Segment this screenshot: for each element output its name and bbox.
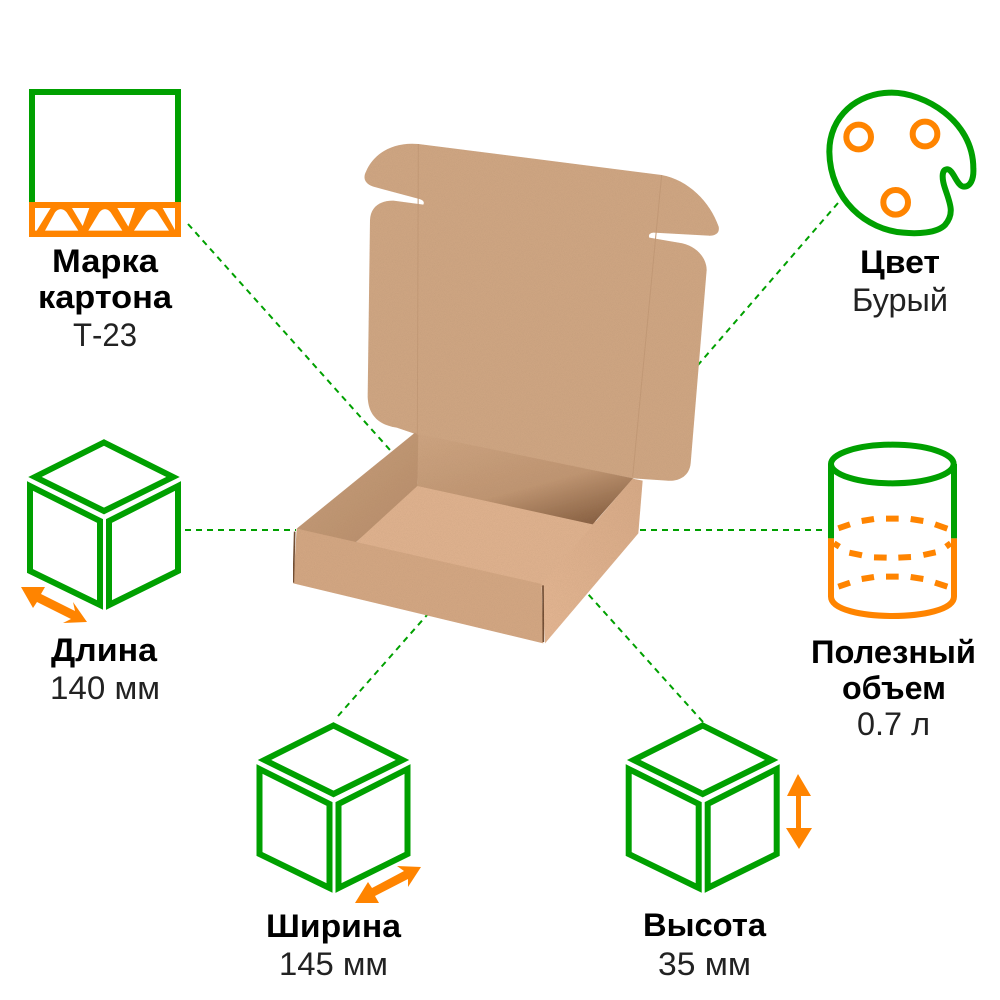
label: Марка картона: Т-23 xyxy=(73,317,137,353)
label: Ширина xyxy=(266,908,401,982)
left wall xyxy=(297,433,418,544)
length block: Длина xyxy=(21,442,178,706)
icon: corrugated cardboard xyxy=(29,92,181,237)
corrugated cardboard block: Марка картона xyxy=(29,92,181,353)
label: Марка картона xyxy=(38,243,172,353)
label: Высота: Высота xyxy=(643,907,766,943)
width block: Ширина xyxy=(260,726,421,982)
label: Полезный объем: 0.7 л xyxy=(857,706,930,742)
icon: cube with length arrow xyxy=(21,442,178,623)
label: Ширина: 145 мм xyxy=(279,946,388,982)
label: Высота xyxy=(643,907,766,982)
label: Высота: 35 мм xyxy=(658,946,751,982)
label: Цвет: Цвет xyxy=(860,244,940,280)
label: Длина xyxy=(50,632,160,706)
icon: cube with width arrow xyxy=(260,726,421,903)
label: Цвет xyxy=(852,244,948,318)
lid fold lines xyxy=(417,144,662,477)
box floor xyxy=(352,483,597,587)
corner edges xyxy=(293,532,543,642)
label: Длина: 140 мм xyxy=(50,670,160,706)
icon: cube with height arrow xyxy=(629,726,812,888)
label: Полезный объем: Полезный xyxy=(811,634,976,670)
label: Марка картона: картона xyxy=(38,279,172,315)
label: Ширина: Ширина xyxy=(266,908,401,944)
connector lines xyxy=(185,203,838,722)
label: Полезный объем: объем xyxy=(842,670,946,706)
colour block: Цвет xyxy=(829,93,973,318)
icon: paint palette xyxy=(829,93,973,233)
right wall xyxy=(542,479,643,643)
back wall xyxy=(417,434,633,524)
label: Марка картона: Марка xyxy=(52,243,158,279)
label: Цвет: Бурый xyxy=(852,282,948,318)
volume block: Полезный объем xyxy=(811,445,976,742)
cardboard box photo xyxy=(293,144,719,643)
label: Длина: Длина xyxy=(51,632,157,668)
front wall xyxy=(293,529,543,643)
open lid with flaps xyxy=(364,144,719,481)
label: Полезный объем xyxy=(811,634,976,742)
height block: Высота xyxy=(629,726,812,982)
icon: cylinder xyxy=(831,445,954,616)
